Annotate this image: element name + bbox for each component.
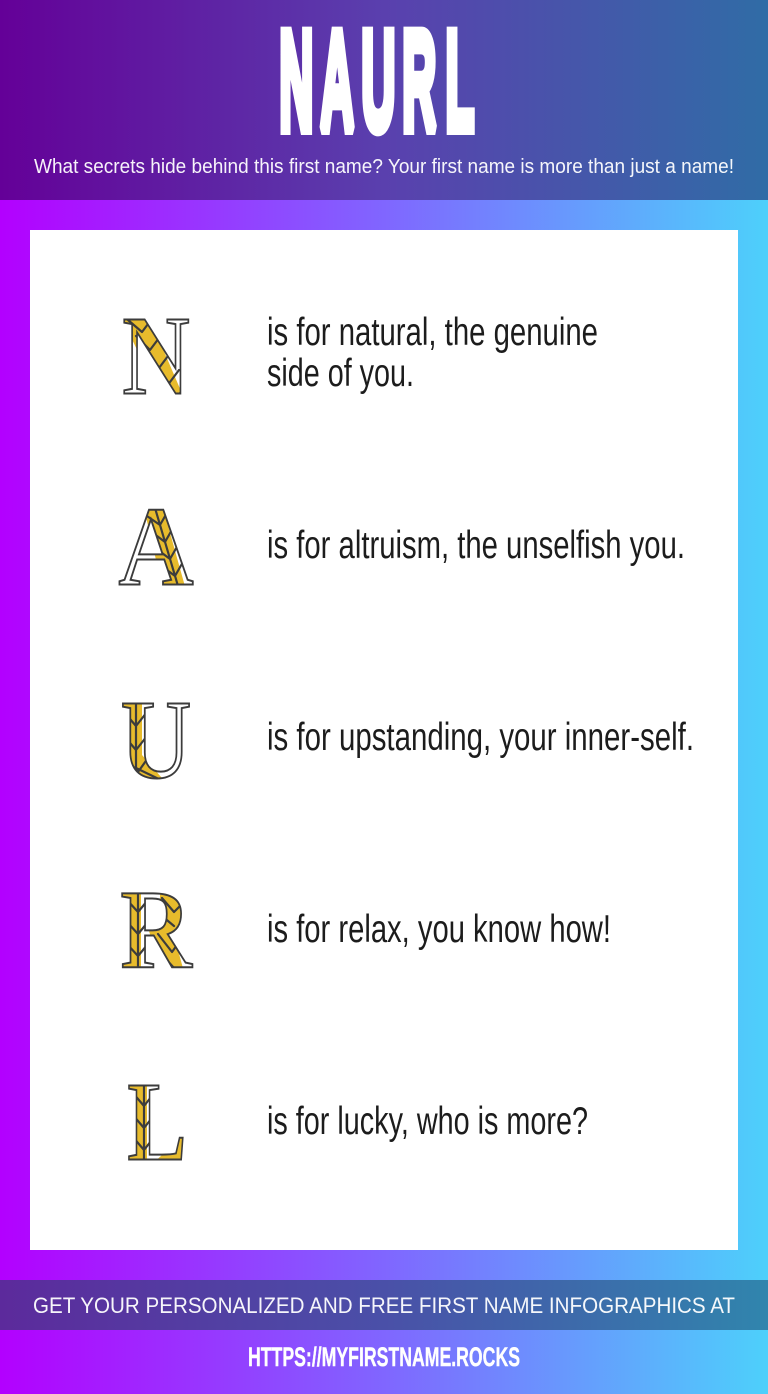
row L — [128, 1084, 587, 1160]
white content panel — [30, 230, 738, 1250]
footer band — [0, 1280, 768, 1330]
header band — [0, 0, 768, 200]
text: N line: side of you. — [267, 352, 414, 395]
icon: wheat letter U: U — [120, 676, 192, 803]
icon: wheat letter L — [128, 1084, 184, 1160]
row A — [118, 508, 682, 586]
icon: wheat letter R: R — [120, 866, 193, 993]
icon: wheat letter U — [122, 702, 190, 780]
row N — [123, 316, 597, 394]
icon: wheat letter N: N — [122, 292, 190, 419]
row R — [121, 892, 608, 968]
icon: wheat letter A — [118, 508, 194, 586]
text: L line: is for lucky, who is more? — [267, 1100, 588, 1143]
subtitle: What secrets hide behind this first name? Your first name is more than just a name! — [34, 156, 734, 178]
text: N line: is for natural, the genuine — [267, 311, 598, 354]
text: N line — [267, 311, 598, 395]
icon: wheat letter R — [121, 892, 194, 968]
title: NAURL — [279, 3, 474, 160]
row U — [122, 702, 692, 780]
icon: wheat letter L: L — [127, 1058, 187, 1185]
icon: wheat letter A: A — [118, 483, 194, 610]
footer call to action: GET YOUR PERSONALIZED AND FREE FIRST NAME INFOGRAPHICS AT — [33, 1293, 735, 1318]
footer URL: HTTPS://MYFIRSTNAME.ROCKS — [248, 1342, 520, 1372]
text: R line: is for relax, you know how! — [267, 908, 611, 951]
icon: wheat letter N — [123, 318, 190, 394]
